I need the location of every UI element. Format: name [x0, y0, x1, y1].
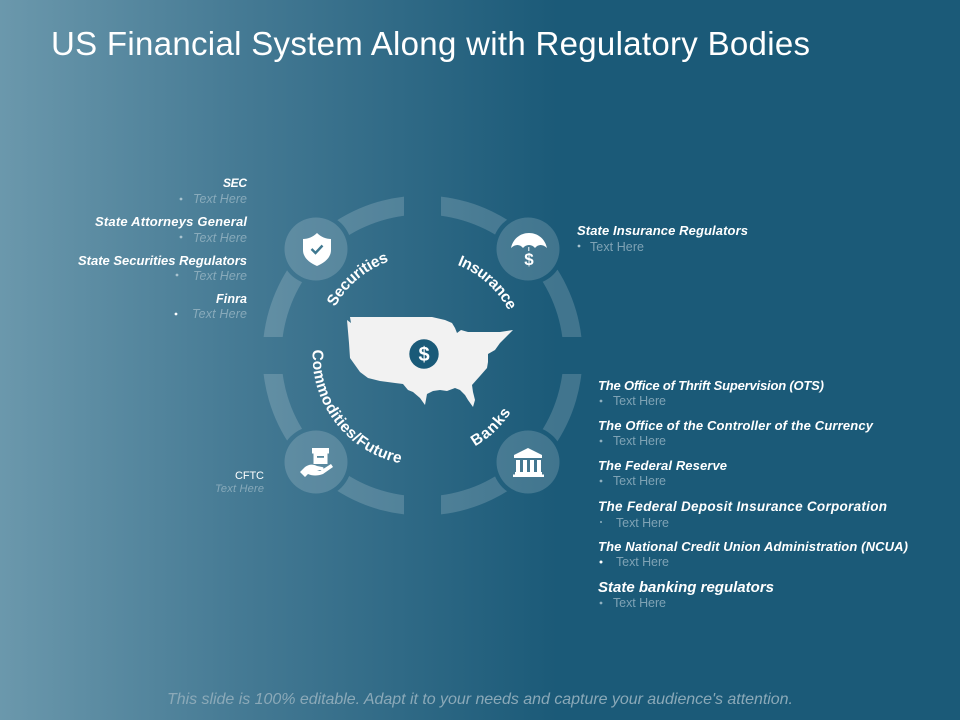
text block: securities regulators: Text Here: [192, 307, 247, 321]
text block: banking regulators: Text Here: [613, 394, 666, 408]
text block: banking regulators: Text Here: [613, 596, 666, 610]
text block: commodities regulators: [215, 470, 264, 495]
text block: securities regulators: State Attorneys General: [95, 214, 247, 229]
label: Securities: Securities: [327, 254, 388, 306]
text block: insurance regulators: [577, 223, 748, 254]
text block: insurance regulators: Text Here: [590, 240, 644, 254]
icon: dollar coin: $: [418, 344, 430, 366]
title: US Financial System Along with Regulatory Bodies: [51, 25, 810, 62]
text block: commodities regulators: CFTC: [235, 470, 264, 482]
text block: banking regulators: Text Here: [613, 474, 666, 488]
text block: securities regulators: [78, 176, 247, 321]
text block: banking regulators: The Federal Reserve: [598, 458, 727, 473]
icon: banks building: [492, 426, 564, 498]
map of the United States: [347, 317, 513, 407]
text block: banking regulators: [598, 378, 908, 610]
text block: banking regulators: Text Here: [616, 516, 669, 530]
text block: banking regulators: The Office of the Controller of the Currency: [598, 418, 874, 433]
text block: securities regulators: SEC: [223, 176, 247, 190]
icon: dollar coin: [409, 339, 439, 369]
label: Insurance: Insurance: [458, 255, 514, 309]
text block: insurance regulators: State Insurance Regulators: [577, 223, 748, 238]
text block: banking regulators: Text Here: [613, 434, 666, 448]
icon: securities shield: [280, 213, 352, 285]
text block: banking regulators: The Office of Thrift Supervision (OTS): [598, 378, 824, 393]
text block: commodities regulators: Text Here: [215, 483, 264, 495]
text block: banking regulators: The Federal Deposit Insurance Corporation: [598, 499, 887, 514]
text block: banking regulators: The National Credit Union Administration (NCUA): [598, 539, 908, 554]
text block: securities regulators: Text Here: [193, 269, 247, 283]
ring diagram: [264, 196, 582, 514]
ring segment: bottom left: [264, 374, 404, 514]
icon: insurance umbrella: [492, 213, 564, 285]
text block: banking regulators: State banking regulators: [598, 579, 774, 596]
label: Banks: Banks: [470, 409, 510, 446]
footer note: This slide is 100% editable. Adapt it to your needs and capture your audience's attention.: [167, 691, 793, 708]
text block: securities regulators: Text Here: [193, 192, 247, 206]
icon: insurance umbrella: $: [524, 250, 534, 269]
text block: securities regulators: Finra: [216, 292, 247, 306]
text block: securities regulators: Text Here: [193, 231, 247, 245]
text block: banking regulators: Text Here: [616, 555, 669, 569]
text block: securities regulators: State Securities Regulators: [78, 253, 247, 268]
label: Commodities/Future: Commodities/Future: [312, 350, 401, 463]
ring segment: top right: [441, 197, 581, 337]
ring segment: top left: [264, 197, 404, 337]
icon: commodities hand with box: [280, 426, 352, 498]
ring segment: bottom right: [441, 374, 581, 514]
